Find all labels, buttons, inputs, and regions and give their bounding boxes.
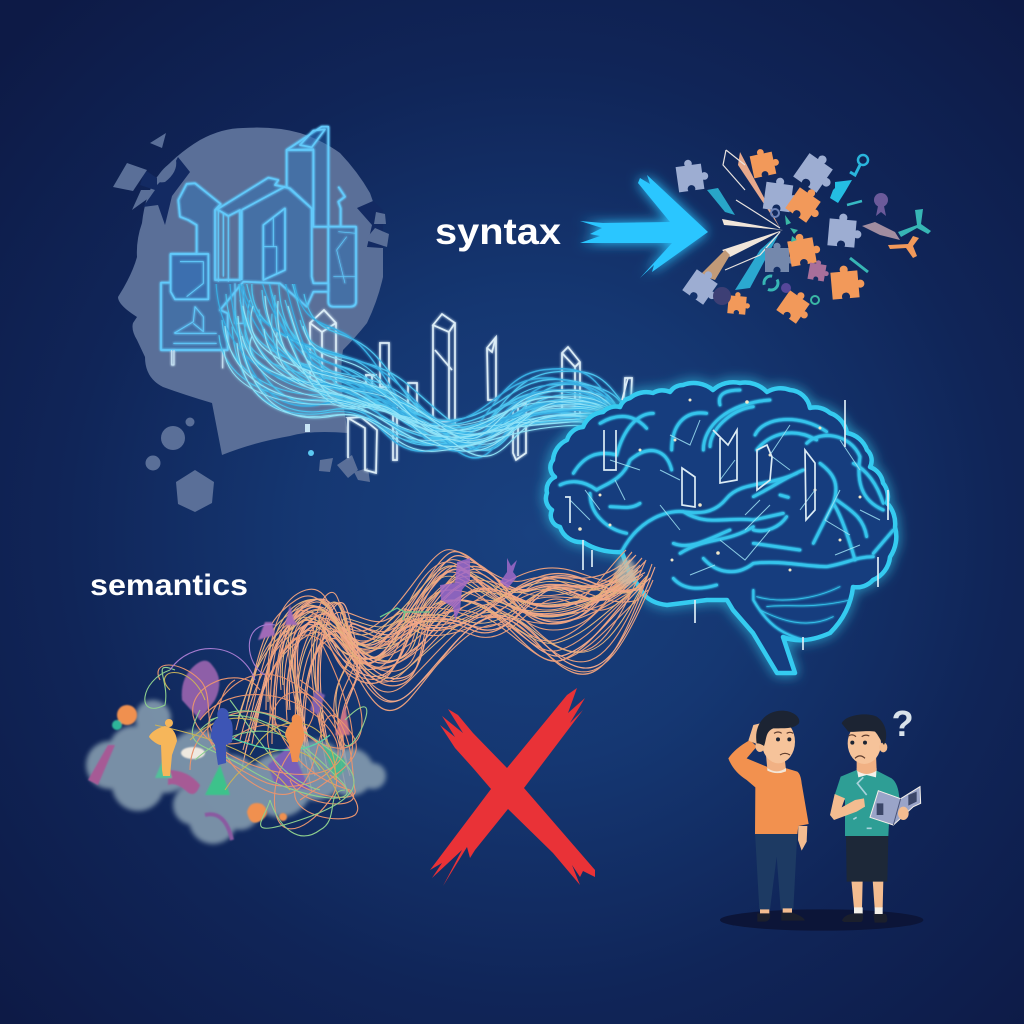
orange wire stream	[236, 550, 655, 792]
green wire	[380, 608, 430, 620]
head cracks	[140, 157, 383, 248]
book	[870, 787, 921, 825]
purple figures in the stream	[440, 558, 517, 620]
man torso	[728, 740, 809, 834]
man: scratching head	[728, 711, 809, 922]
ground shadow	[720, 909, 923, 931]
yellow figure	[149, 719, 177, 776]
panel: head silhouette with syntax structures	[113, 127, 389, 512]
boy: reading book	[830, 703, 921, 923]
arrow: cyan arrow to puzzle	[580, 175, 708, 278]
boy head	[857, 755, 877, 774]
brain folds	[560, 390, 893, 640]
man head	[766, 753, 786, 772]
boy legs	[851, 880, 883, 908]
puzzle: orange pieces	[727, 146, 866, 327]
colour splashes	[88, 605, 350, 840]
orange figure	[285, 714, 304, 762]
brain neurons	[570, 420, 880, 575]
question mark: ?	[892, 703, 914, 744]
blue figure	[211, 708, 233, 765]
paper streaks	[700, 150, 783, 290]
white buildings along the stream	[310, 310, 632, 473]
small fragments	[713, 155, 931, 305]
stream junction glow	[616, 558, 636, 586]
puzzle: slate pieces	[675, 148, 863, 308]
brain neuron dots	[578, 398, 862, 572]
white pillars in brain	[565, 378, 888, 650]
syntax label: syntax	[435, 211, 561, 252]
blue wire stream	[214, 284, 622, 460]
glowing brain	[546, 378, 896, 673]
semantics label: semantics	[90, 569, 248, 602]
red X	[430, 688, 595, 886]
panel: scattered puzzle pieces and book	[675, 146, 931, 327]
glowing buildings in the head	[161, 127, 356, 368]
tangled wires	[145, 625, 367, 836]
head silhouette	[118, 128, 383, 455]
panel: semantic tangle cloud with figures	[86, 605, 386, 844]
cloud	[86, 700, 386, 844]
pendant from the wires	[305, 424, 314, 456]
broken shards	[113, 133, 389, 512]
boy torso	[835, 770, 899, 836]
man legs	[755, 833, 797, 909]
panel: two confused people	[720, 703, 923, 931]
brain outline	[546, 382, 896, 673]
